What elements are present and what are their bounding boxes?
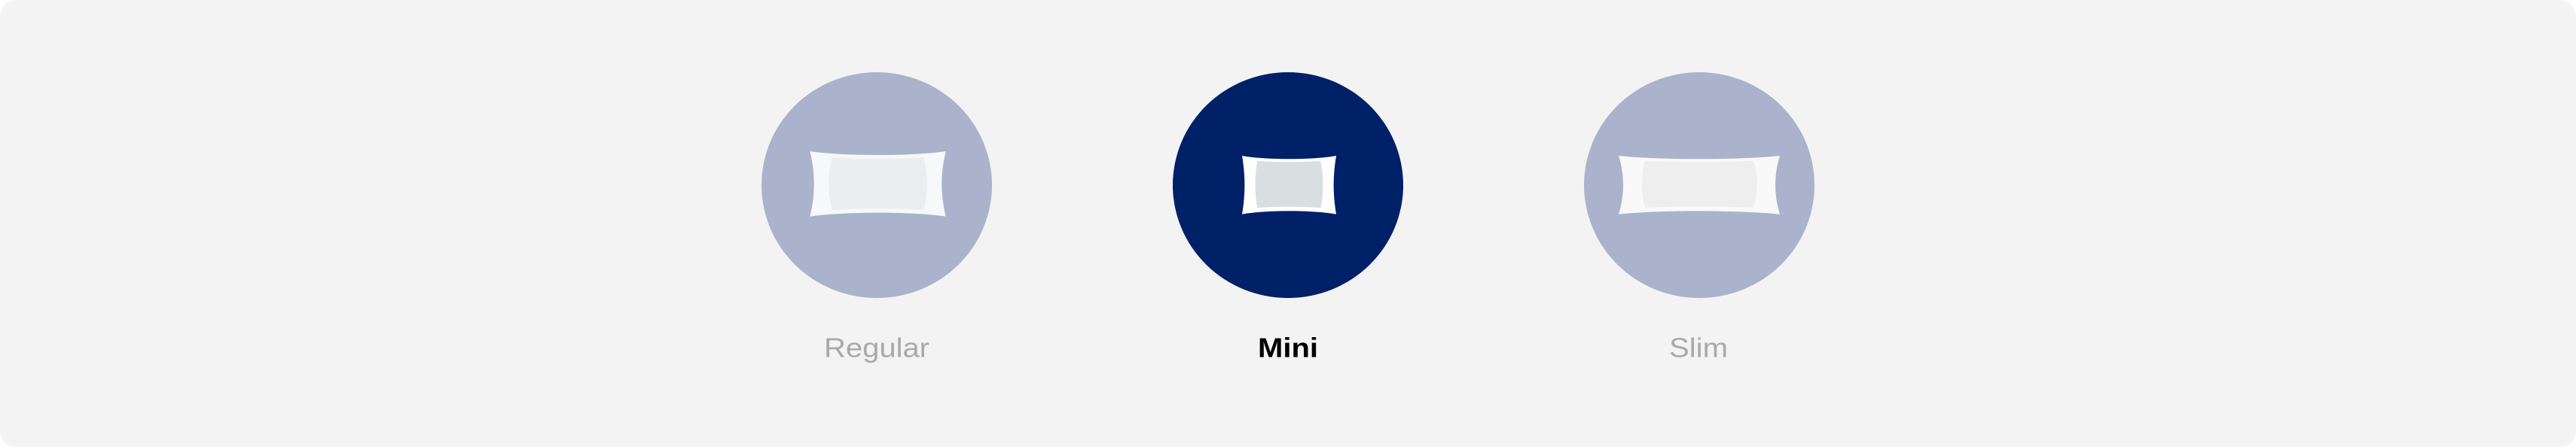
label: Mini: Mini (1258, 332, 1318, 363)
option: Slim (1584, 72, 1814, 363)
icon: mini outer screen (1242, 156, 1336, 214)
icon: slim outer screen (1619, 156, 1780, 214)
icon: mini inner screen (1255, 161, 1323, 208)
icon: regular circle (762, 72, 992, 298)
icon: regular outer screen (810, 151, 946, 217)
option: Regular (762, 72, 992, 363)
icon: slim circle (1584, 72, 1814, 298)
label: Slim: Slim (1669, 332, 1728, 363)
label: Regular: Regular (824, 332, 929, 363)
icon: regular inner screen (829, 157, 927, 210)
icon: mini circle (1173, 72, 1403, 298)
icon: slim inner screen (1642, 161, 1757, 208)
option: Mini (selected) (1173, 72, 1403, 363)
